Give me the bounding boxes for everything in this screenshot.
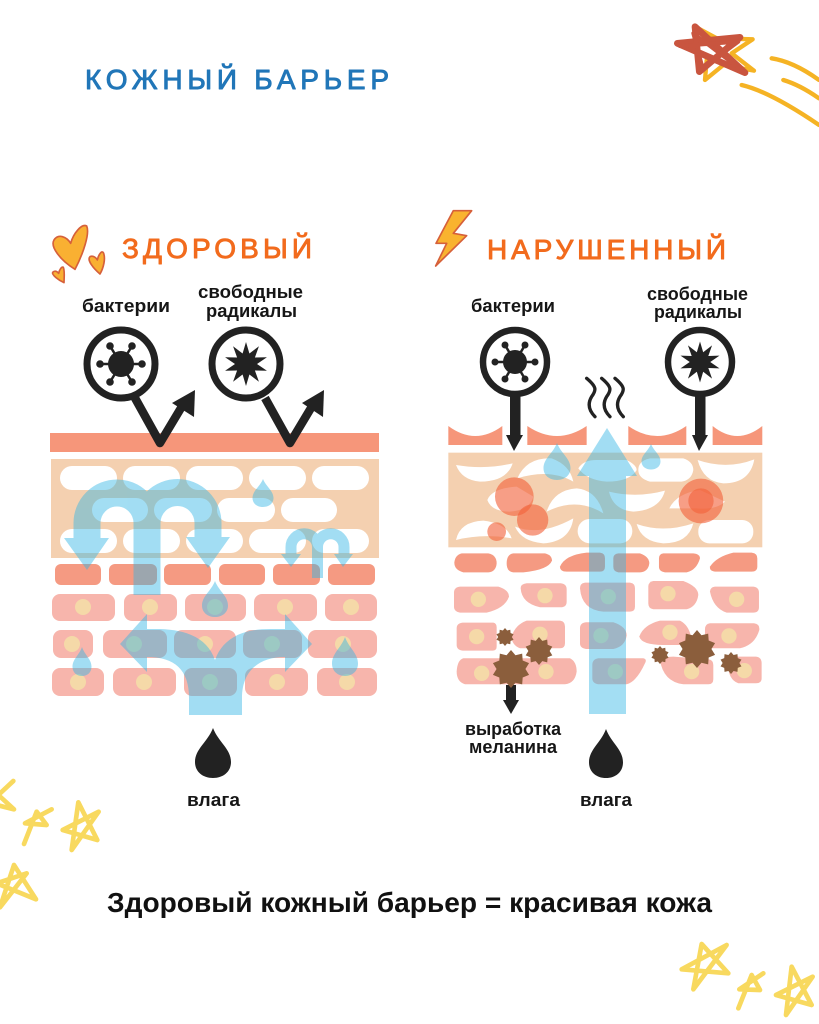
icon: bacteria with deflected arrow — [87, 330, 195, 443]
label: moisture: влага — [580, 790, 633, 810]
drop: right — [332, 637, 358, 676]
panel: damaged skin diagram — [448, 284, 762, 810]
icon: free radical with penetrating arrow — [668, 330, 732, 451]
label: moisture: влага — [187, 790, 241, 810]
icon: evaporation steam — [587, 378, 623, 417]
decoration: shooting star — [677, 27, 819, 125]
icon: lightning — [436, 211, 472, 266]
drop: centre — [202, 581, 228, 617]
melanin spots — [493, 628, 741, 688]
arrow: melanin downward — [503, 685, 519, 714]
decoration: stars bottom right — [682, 944, 813, 1015]
label: free radicals: свободные — [198, 282, 303, 302]
drop: right — [642, 444, 660, 470]
red brick row — [55, 564, 375, 585]
footer statement: Здоровый кожный барьер = красивая кожа — [107, 887, 712, 918]
inflammation circles — [487, 477, 723, 541]
arrow: small looping moisture arrow — [281, 534, 353, 578]
red brick row — [454, 553, 757, 572]
skin surface band — [50, 433, 379, 452]
broken skin surface band — [448, 426, 762, 445]
label: melanin production: меланина — [469, 737, 558, 757]
blue moisture arrows — [64, 479, 358, 715]
icon: free radical with deflected arrow — [212, 330, 324, 443]
cell nuclei — [469, 586, 752, 681]
label: free radicals: радикалы — [654, 302, 742, 322]
pink cells — [454, 581, 762, 684]
arrow: forked moisture arrow — [120, 614, 312, 715]
decoration: stars bottom left — [0, 781, 99, 907]
icon: hearts — [53, 226, 104, 283]
drop: upper — [252, 479, 274, 507]
icon: bacteria with penetrating arrow — [483, 330, 547, 451]
label: free radicals: свободные — [647, 284, 748, 304]
pink cells — [52, 594, 377, 696]
drop: left — [544, 443, 570, 480]
panel: healthy skin diagram — [50, 282, 379, 810]
heading: damaged: НАРУШЕННЫЙ — [487, 234, 726, 265]
title: КОЖНЫЙ БАРЬЕР — [85, 64, 389, 95]
icon: moisture drop — [195, 728, 231, 778]
label: free radicals: радикалы — [206, 301, 297, 321]
heading: healthy: ЗДОРОВЫЙ — [122, 233, 312, 264]
label: bacteria: бактерии — [471, 296, 555, 316]
beige dermis with broken cells — [448, 453, 762, 547]
cell nuclei — [64, 599, 359, 690]
arrow: large looping moisture arrow — [64, 492, 230, 595]
icon: moisture drop — [589, 729, 623, 778]
arrow: moisture escaping upward — [577, 428, 637, 714]
beige dermis layer — [51, 459, 379, 558]
label: melanin production: выработка — [465, 719, 562, 739]
drop: left — [72, 647, 92, 676]
blue moisture escape — [544, 428, 660, 714]
label: bacteria: бактерии — [82, 296, 170, 316]
